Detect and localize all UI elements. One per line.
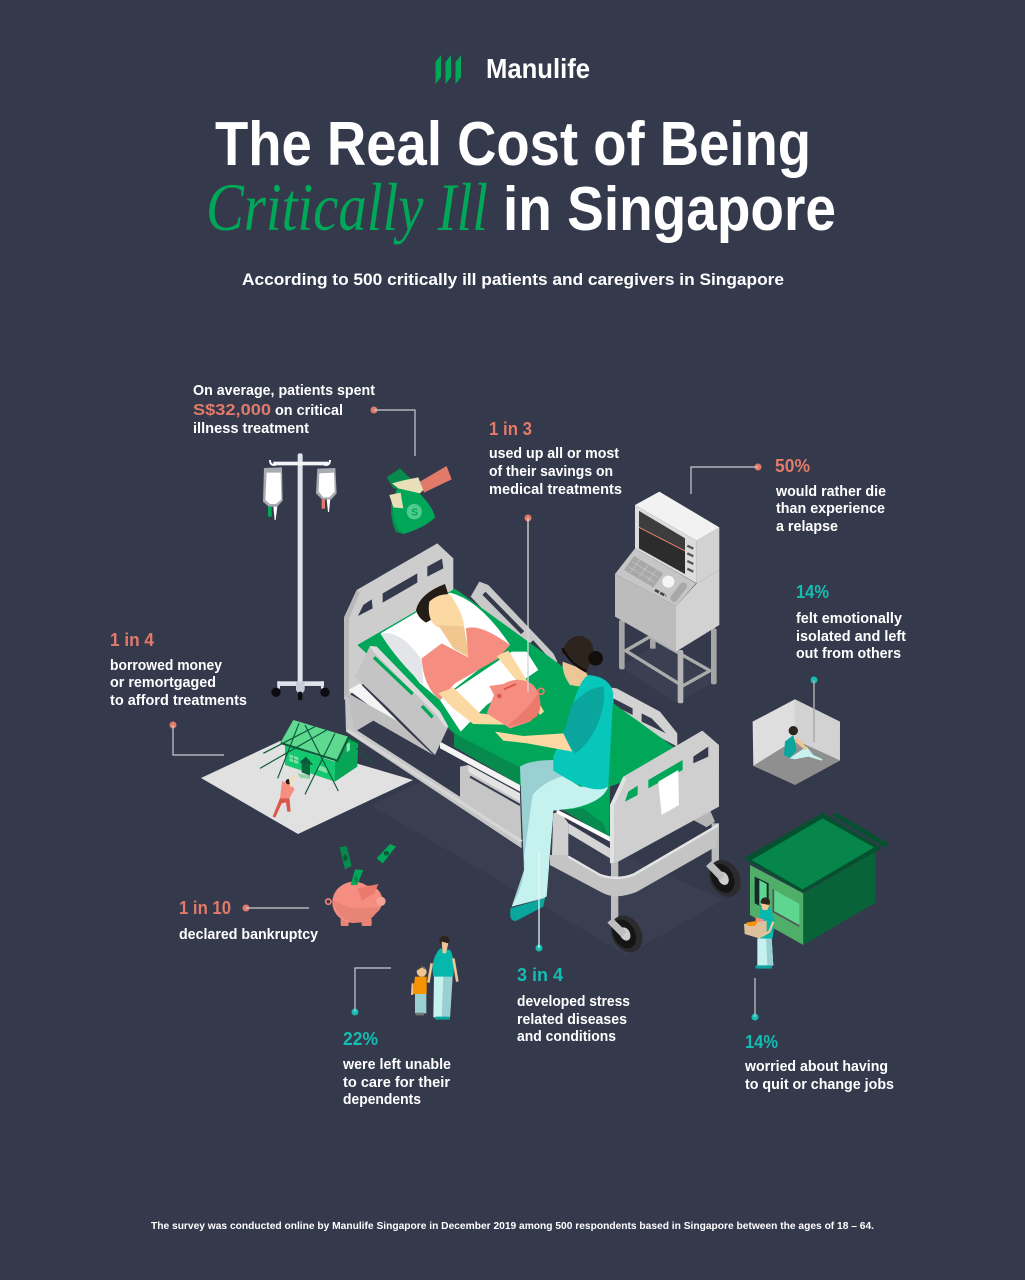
- callout: 1 in 4 borrowed: borrowed money: [110, 657, 223, 674]
- illustration: hand holding money bag: S: [411, 507, 418, 518]
- illustration: IV stand: [263, 453, 337, 700]
- pillow and blanket: [381, 593, 538, 732]
- callout: 1 in 4 borrowed: or remortgaged: [110, 674, 216, 691]
- illustration: caregiver with child: [412, 936, 457, 1020]
- logo: Manulife: [436, 53, 590, 84]
- callout: 1 in 4 borrowed: to afford treatments: [110, 692, 247, 709]
- callout: 50% relapse: would rather die: [775, 483, 886, 500]
- illustration: green house tied down on grey plate: [201, 720, 413, 834]
- far side rails: [471, 582, 677, 747]
- subtitle: According to 500 critically ill patients and caregivers in Singapore: [242, 270, 784, 289]
- piggy bank on patient: [487, 680, 544, 728]
- wheels and legs: [605, 823, 747, 958]
- callout: 14% quit jobs: to quit or change jobs: [745, 1076, 894, 1093]
- callout: 22% dependents: [342, 968, 451, 1108]
- title: Critically Ill: [206, 169, 488, 245]
- callout: 50% relapse: a relapse: [776, 518, 838, 535]
- footnote: The survey was conducted online by Manulife Singapore in December 2019 among 500 respondents based in Singapore between the ages of 18 – 64.: [151, 1220, 874, 1232]
- callout: 1 in 10 bankruptcy: declared bankruptcy: [179, 926, 319, 943]
- callout: 1 in 3 savings: medical treatments: [489, 481, 622, 498]
- callout: S$32,000 treatment: On average, patients spent: [193, 382, 375, 399]
- illustration: piggy bank with flying money: [326, 844, 396, 926]
- callout: 1 in 3 savings: used up all or most: [489, 445, 619, 462]
- callout: 1 in 10 bankruptcy: 1 in 10: [179, 898, 231, 918]
- illustration: hospital bed with patient and nurse: [344, 543, 747, 958]
- illustration: hand holding money bag: [387, 466, 452, 534]
- callout: 14% emotionally isolated: [796, 582, 906, 742]
- callout: S$32,000 treatment: illness treatment: [193, 420, 309, 437]
- callout: 22% dependents: dependents: [343, 1091, 421, 1108]
- side frame: [345, 697, 719, 896]
- floor shadow: [370, 773, 723, 955]
- callout: S$32,000 treatment: S$32,000: [193, 402, 271, 419]
- illustration: patient monitor: [615, 492, 719, 703]
- callout: S$32,000 treatment: on critical: [275, 402, 343, 419]
- callout: 1 in 4 borrowed: [110, 630, 247, 755]
- callout: 14% quit jobs: worried about having: [744, 1058, 888, 1075]
- callout: 1 in 3 savings: of their savings on: [489, 463, 613, 480]
- callout: 3 in 4 stress: related diseases: [517, 1011, 627, 1028]
- callout: 50% relapse: 50%: [775, 456, 810, 476]
- callout: 22% dependents: were left unable: [342, 1056, 451, 1073]
- illustration: green shop with worker: [743, 813, 889, 969]
- callout: 50% relapse: than experience: [776, 500, 885, 517]
- callout: 1 in 3 savings: [489, 419, 622, 692]
- callout: 3 in 4 stress: developed stress: [517, 993, 630, 1010]
- callout: 50% relapse: [691, 456, 886, 535]
- mattress: [357, 589, 683, 842]
- title: The Real Cost of Being: [215, 110, 811, 179]
- near side rail: [355, 646, 448, 755]
- footboard: [610, 731, 719, 863]
- callout: 14% emotionally isolated: isolated and left: [796, 628, 906, 645]
- callout: 3 in 4 stress: and conditions: [517, 1028, 616, 1045]
- logo: Manulife: Manulife: [486, 53, 590, 84]
- callout: 14% quit jobs: 14%: [745, 1032, 778, 1052]
- callout: S$32,000 treatment: [193, 382, 415, 456]
- callout: 1 in 4 borrowed: 1 in 4: [110, 630, 154, 650]
- callout: 1 in 10 bankruptcy: [179, 898, 319, 943]
- callout: 14% quit jobs: [744, 978, 894, 1093]
- title: [206, 110, 836, 245]
- patient: [416, 584, 544, 725]
- callout: 3 in 4 stress: 3 in 4: [517, 965, 563, 985]
- head section wedge: [348, 683, 433, 755]
- callout: 14% emotionally isolated: 14%: [796, 582, 829, 602]
- title: in Singapore: [503, 175, 836, 244]
- callout: 14% emotionally isolated: out from others: [796, 645, 901, 662]
- nurse: [495, 636, 613, 921]
- callout: 22% dependents: 22%: [343, 1029, 378, 1049]
- callout: 22% dependents: to care for their: [343, 1074, 450, 1091]
- callout: 1 in 3 savings: 1 in 3: [489, 419, 532, 439]
- illustration: isolated person in room: [753, 699, 840, 785]
- headboard: [344, 543, 453, 700]
- callout: 14% emotionally isolated: felt emotionally: [796, 610, 903, 627]
- callout: 3 in 4 stress: [517, 852, 630, 1045]
